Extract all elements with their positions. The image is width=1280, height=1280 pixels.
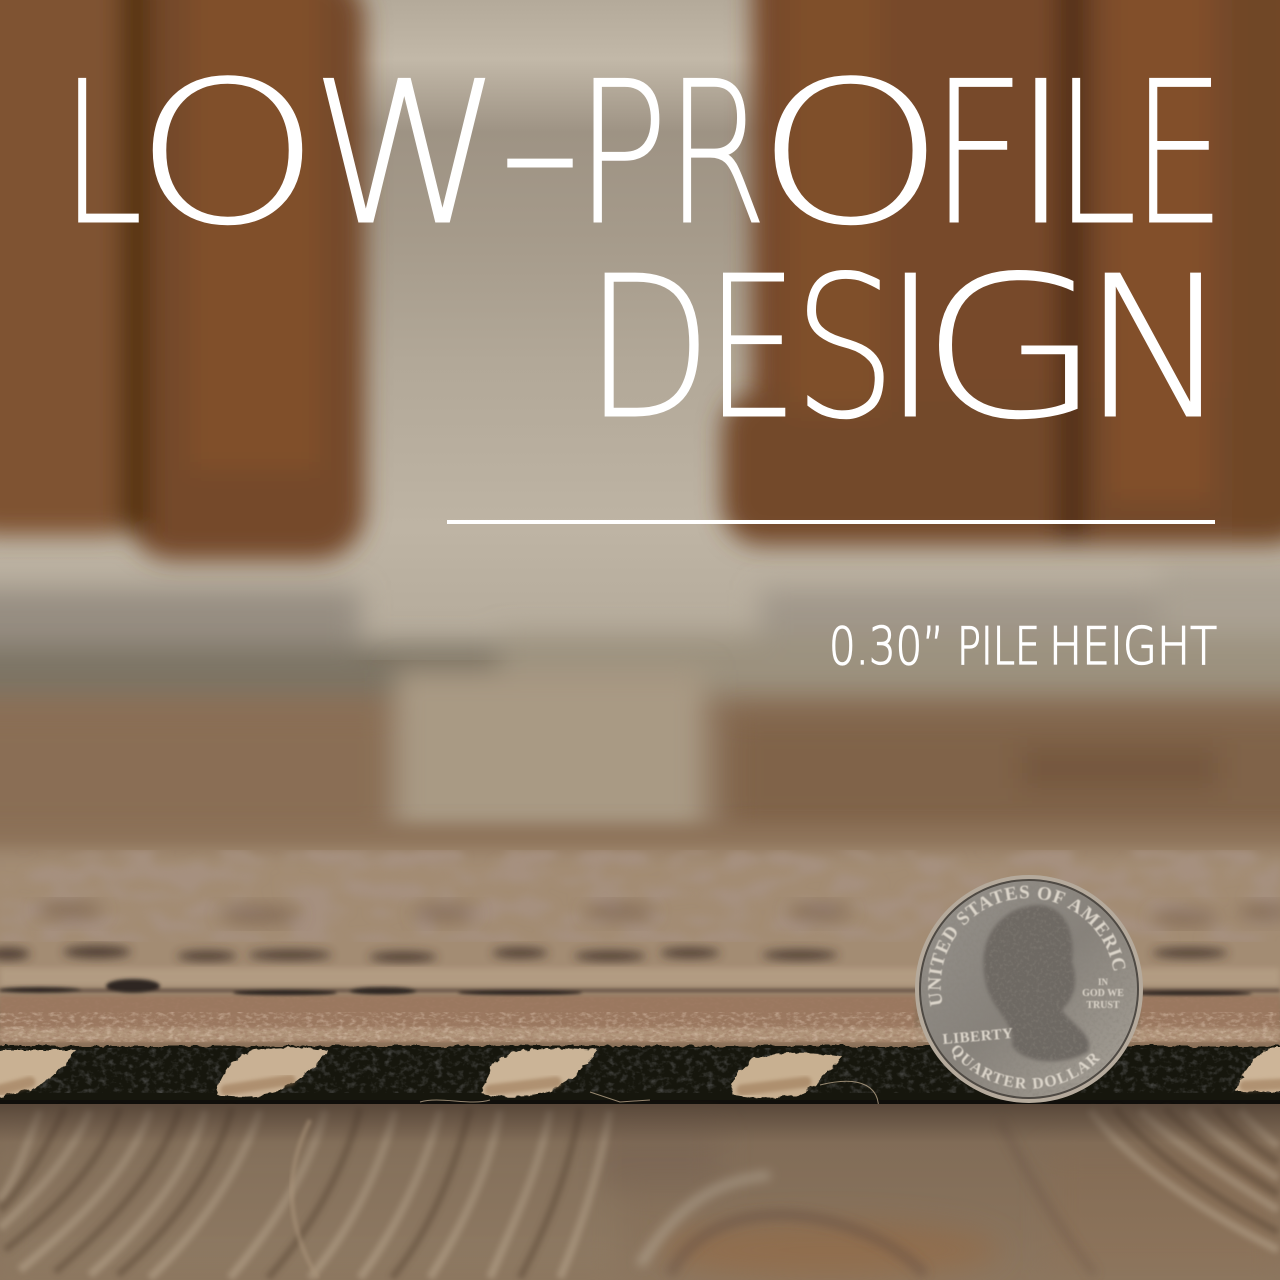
rope border: black and jute twist xyxy=(0,1046,1280,1133)
title line 1: I xyxy=(1012,40,1070,269)
wall and doorway xyxy=(0,0,1280,660)
title line 1: - xyxy=(496,35,584,264)
title line 1: O xyxy=(756,40,945,269)
coin lettering xyxy=(928,885,1126,1090)
jute segment 4 xyxy=(732,1052,842,1098)
title line 2: D xyxy=(585,235,712,463)
jute segment 5 xyxy=(1236,1048,1280,1092)
wood knot arcs xyxy=(640,1120,1095,1275)
quarter coin xyxy=(915,875,1143,1103)
rug top, out of focus xyxy=(0,826,1280,1001)
jute segment 3 xyxy=(482,1049,598,1097)
curtain panel left xyxy=(0,0,365,560)
coin lettering: QUARTER DOLLAR xyxy=(952,1045,1101,1090)
coin lettering: GOD WE xyxy=(1082,988,1124,999)
title line 1: F xyxy=(930,40,1026,269)
wood floor xyxy=(0,1104,1280,1280)
title line 1: O xyxy=(134,40,321,269)
title line 1: L xyxy=(1054,40,1137,269)
divider rule xyxy=(447,520,1215,524)
rug weave blobs xyxy=(36,902,1280,926)
coin lettering: LIBERTY xyxy=(942,1026,1014,1048)
jute segment 2 xyxy=(216,1048,328,1097)
title line 1: P xyxy=(575,40,668,269)
pile height label: 0.30” xyxy=(829,617,944,677)
title line 1: R xyxy=(666,40,767,269)
coin lettering: IN xyxy=(1098,977,1108,987)
title line 2: S xyxy=(793,235,896,463)
grain streaks xyxy=(0,1110,1278,1278)
title line 2: I xyxy=(882,235,940,463)
distant floor xyxy=(0,670,1280,835)
pile height label: HEIGHT xyxy=(1049,617,1217,677)
title xyxy=(60,35,1231,463)
coin lettering: TRUST xyxy=(1086,1000,1120,1011)
rug: stitched stripes xyxy=(0,946,1280,1042)
title line 2: G xyxy=(920,235,1102,463)
title line 1: L xyxy=(60,40,143,269)
skirting band xyxy=(0,570,1280,695)
coin lettering: UNITED STATES OF AMERICA xyxy=(928,885,1126,1007)
floor crack xyxy=(292,1120,318,1278)
jute segment 1 xyxy=(0,1050,76,1098)
title line 1: W xyxy=(310,40,503,269)
title line 1: E xyxy=(1132,40,1225,269)
coin portrait xyxy=(983,905,1089,1061)
curtain panel right xyxy=(722,0,1280,545)
loose fibres xyxy=(420,1081,878,1133)
title line 2: E xyxy=(706,235,798,463)
pile height label: PILE xyxy=(957,617,1040,677)
title line 2: N xyxy=(1081,235,1231,463)
